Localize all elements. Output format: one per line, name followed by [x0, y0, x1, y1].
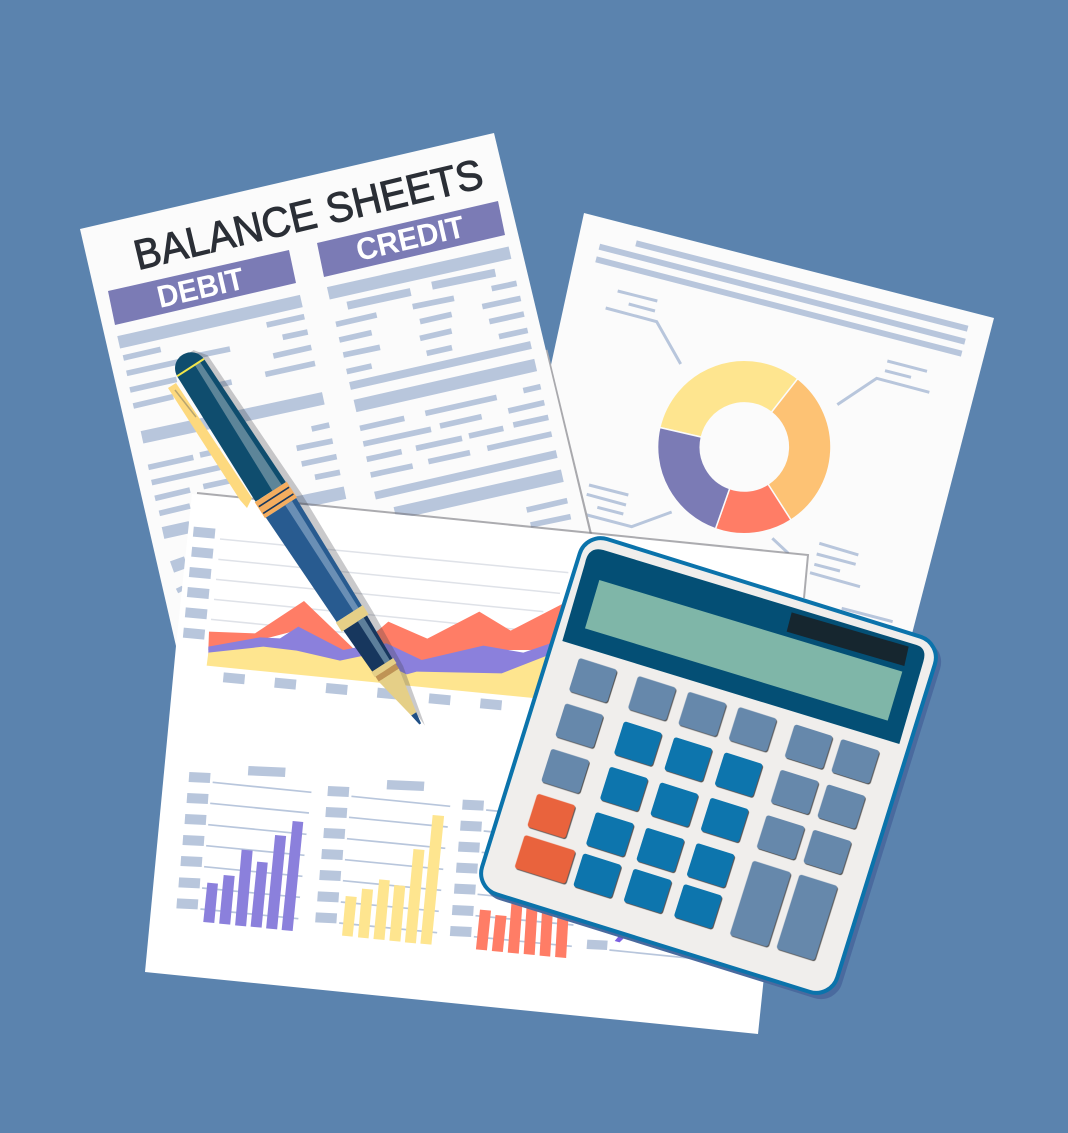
purple area	[208, 627, 570, 678]
area chart	[183, 532, 570, 705]
grid lines	[211, 539, 568, 643]
calculator	[476, 533, 947, 1005]
sheet paper	[500, 213, 994, 680]
calculator face	[514, 549, 924, 961]
sheet paper	[80, 133, 590, 646]
grip	[343, 615, 394, 673]
nib	[379, 669, 424, 720]
debit header	[108, 250, 296, 325]
display housing	[562, 549, 924, 744]
calculator body	[476, 533, 941, 998]
yellow bar chart	[316, 785, 450, 945]
bar charts	[177, 771, 691, 958]
pen clip	[168, 383, 252, 508]
credit header: CREDIT	[353, 209, 468, 268]
red area	[208, 600, 570, 663]
orange keys	[514, 793, 576, 884]
title: BALANCE SHEETS	[129, 150, 487, 279]
upper cap	[167, 345, 286, 502]
gold band	[255, 482, 297, 518]
calculator shadow	[478, 536, 947, 1005]
lower ring	[336, 605, 369, 632]
donut chart	[658, 360, 831, 534]
panel: balance sheet	[80, 133, 590, 646]
debit and credit table rows	[119, 253, 571, 525]
shadow edge of balance sheet	[546, 350, 591, 536]
sheet edge shadow	[197, 493, 808, 598]
sheet paper	[145, 494, 808, 1034]
partly hidden fourth chart	[587, 937, 691, 958]
blue keys	[573, 721, 763, 929]
pen	[166, 341, 443, 738]
yellow area	[207, 647, 570, 702]
purple bar chart	[177, 771, 311, 931]
red bar chart	[450, 805, 585, 958]
solar panel	[787, 612, 909, 666]
pen shadow	[184, 343, 443, 727]
credit header	[317, 201, 505, 277]
grey keys	[541, 658, 880, 961]
pen body	[166, 341, 443, 738]
panel: charts sheet	[145, 493, 808, 1034]
nib collar	[371, 658, 396, 677]
axis labels	[183, 532, 502, 705]
display screen	[585, 580, 902, 721]
debit header: DEBIT	[154, 261, 247, 315]
barrel	[266, 498, 364, 624]
panel: donut chart sheet	[500, 213, 994, 680]
heading lines	[583, 243, 968, 622]
rows at left of lower sheet	[163, 527, 190, 591]
